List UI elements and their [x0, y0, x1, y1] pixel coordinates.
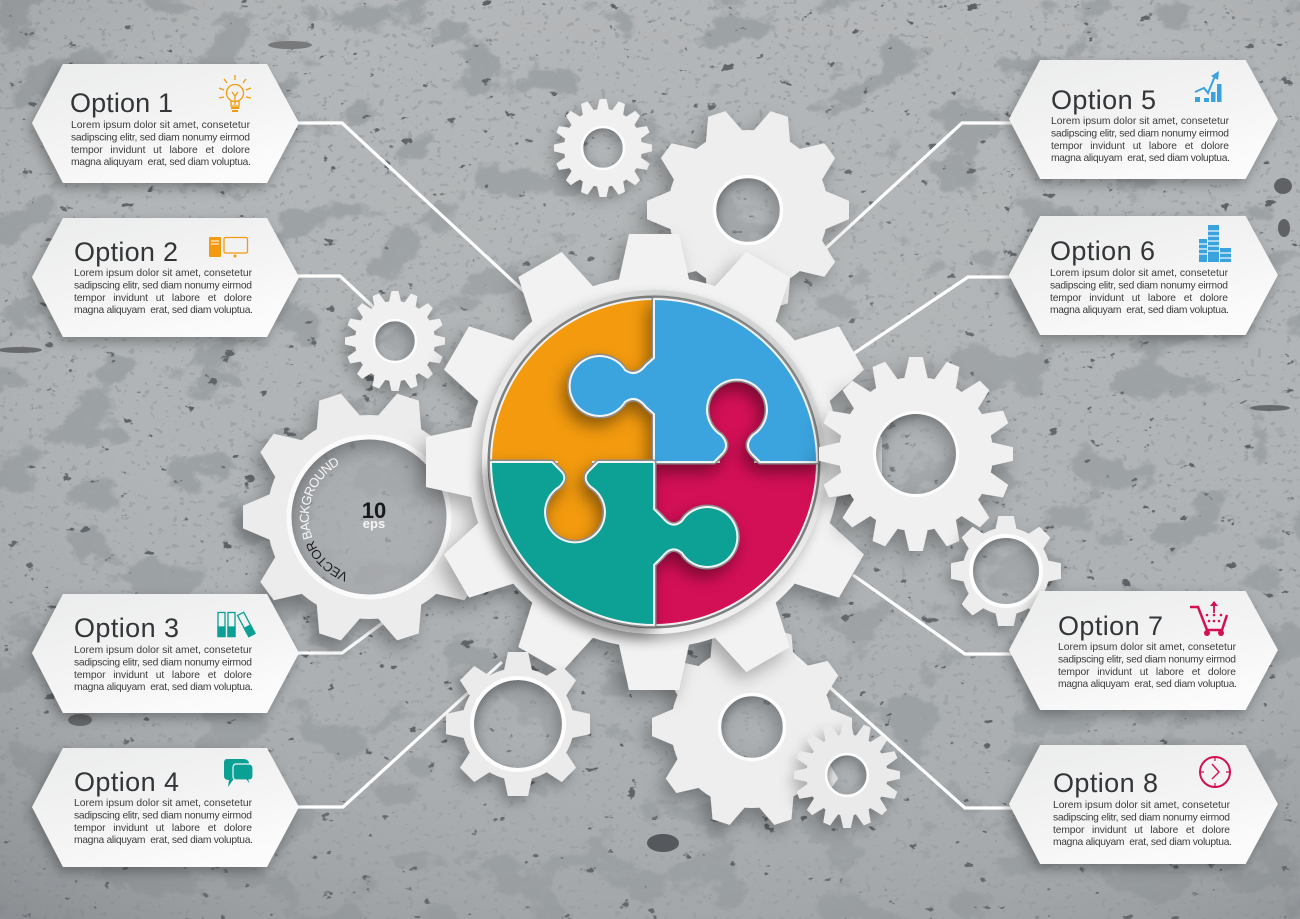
label: 10 eps: 10 [362, 498, 386, 523]
icon: shopping cart [1190, 601, 1227, 636]
text: option 3 body: magna aliquyam erat, sed diam voluptua. [74, 682, 253, 693]
text: option 1 body: sadipscing elitr, sed diam nonumy eirmod [71, 132, 250, 143]
panel: option 7 [1009, 591, 1278, 710]
text: option 8 body: sadipscing elitr, sed diam nonumy eirmod [1053, 812, 1230, 823]
icon: binders [218, 612, 255, 637]
icon: clock [1200, 757, 1230, 787]
panel: option 8 [1009, 745, 1278, 864]
text: option 3 body: Lorem ipsum dolor sit amet, consetetur [74, 645, 253, 656]
text: option 2 body [74, 268, 253, 316]
gear: bottom right small [794, 722, 900, 828]
text: option 4 body: magna aliquyam erat, sed diam voluptua. [74, 835, 253, 846]
text: option 6 body: sadipscing elitr, sed diam nonumy eirmod [1050, 280, 1228, 291]
text: option 6 body: Lorem ipsum dolor sit amet, consetetur [1050, 268, 1229, 279]
text: option 8 body: magna aliquyam erat, sed diam voluptua. [1053, 837, 1232, 848]
main gear body [426, 234, 882, 690]
text: option 1 body: Lorem ipsum dolor sit amet, consetetur [71, 120, 251, 131]
text: option 2 body: Lorem ipsum dolor sit amet, consetetur [74, 268, 253, 279]
text: option 4 body: Lorem ipsum dolor sit amet, consetetur [74, 798, 253, 809]
heading: option 2: Option 2 [74, 237, 178, 267]
text: option 8 body [1053, 800, 1232, 848]
text: option 1 body [71, 120, 251, 168]
text: option 7 body: magna aliquyam erat, sed diam voluptua. [1058, 679, 1237, 690]
puzzle piece: teal [491, 462, 737, 625]
text: option 4 body: sadipscing elitr, sed diam nonumy eirmod [74, 810, 252, 821]
text: option 3 body: tempor invidunt ut labore et dolore [74, 670, 252, 681]
panel: option 5 [1009, 60, 1278, 179]
panel: option 6 [1009, 216, 1278, 335]
main gear with puzzle circle [426, 234, 882, 690]
gear: small top [554, 99, 652, 197]
text: option 2 body: magna aliquyam erat, sed diam voluptua. [74, 305, 253, 316]
text: option 8 body: Lorem ipsum dolor sit amet, consetetur [1053, 800, 1231, 811]
heading: option 3: Option 3 [74, 613, 179, 643]
heading: option 6: Option 6 [1050, 236, 1155, 266]
text: option 5 body: Lorem ipsum dolor sit amet, consetetur [1051, 116, 1230, 127]
text: option 1 body: tempor invidunt ut labore et dolore [71, 145, 250, 156]
icon: speech bubbles [224, 759, 253, 787]
disc rim [482, 290, 826, 634]
text: option 5 body: magna aliquyam erat, sed diam voluptua. [1051, 153, 1230, 164]
label: vector background: VECTOR BACKGROUND [300, 458, 346, 582]
gear: right small below [951, 516, 1061, 626]
text: option 7 body: tempor invidunt ut labore et dolore [1058, 667, 1236, 678]
text: option 3 body: sadipscing elitr, sed diam nonumy eirmod [74, 657, 252, 668]
gear: large top [647, 108, 849, 312]
heading: option 5: Option 5 [1051, 85, 1156, 115]
text: option 2 body: tempor invidunt ut labore et dolore [74, 293, 252, 304]
puzzle piece: red [654, 379, 817, 625]
connector lines [296, 123, 1012, 808]
icon: buildings [1199, 225, 1231, 262]
heading: option 8: Option 8 [1053, 768, 1158, 798]
text: option 7 body: sadipscing elitr, sed diam nonumy eirmod [1058, 654, 1236, 665]
heading: option 7: Option 7 [1058, 611, 1163, 641]
text: option 3 body [74, 645, 253, 693]
panel: option 2 [32, 218, 299, 337]
icon: light bulb [219, 75, 251, 111]
gear: right large [819, 357, 1013, 551]
puzzle piece: blue [570, 299, 817, 462]
text: option 6 body [1050, 268, 1229, 316]
text: option 6 body: magna aliquyam erat, sed diam voluptua. [1050, 305, 1229, 316]
panel: option 4 [32, 748, 299, 867]
gear: large left with vector background label [228, 394, 478, 654]
text: option 7 body [1058, 642, 1237, 690]
panel: option 1 [32, 64, 299, 183]
text: option 6 body: tempor invidunt ut labore et dolore [1050, 293, 1228, 304]
text: option 8 body: tempor invidunt ut labore et dolore [1053, 825, 1230, 836]
text: option 7 body: Lorem ipsum dolor sit amet, consetetur [1058, 642, 1237, 653]
icon: computer [209, 237, 248, 258]
text: option 2 body: sadipscing elitr, sed diam nonumy eirmod [74, 280, 252, 291]
label: 10 eps: eps [363, 516, 385, 531]
gear: small left near option 2 [345, 291, 445, 391]
text: option 5 body: sadipscing elitr, sed diam nonumy eirmod [1051, 128, 1229, 139]
heading: option 1: Option 1 [70, 88, 173, 118]
puzzle piece: orange [491, 299, 654, 543]
text: option 1 body: magna aliquyam erat, sed diam voluptua. [71, 157, 251, 168]
gear: large bottom [652, 626, 852, 828]
panel: option 3 [32, 594, 299, 713]
gear: bottom left [446, 652, 590, 796]
text: option 4 body: tempor invidunt ut labore et dolore [74, 823, 252, 834]
icon: growth chart [1195, 71, 1222, 102]
text: option 5 body: tempor invidunt ut labore et dolore [1051, 141, 1229, 152]
heading: option 4: Option 4 [74, 767, 179, 797]
text: option 5 body [1051, 116, 1230, 164]
text: option 4 body [74, 798, 253, 846]
